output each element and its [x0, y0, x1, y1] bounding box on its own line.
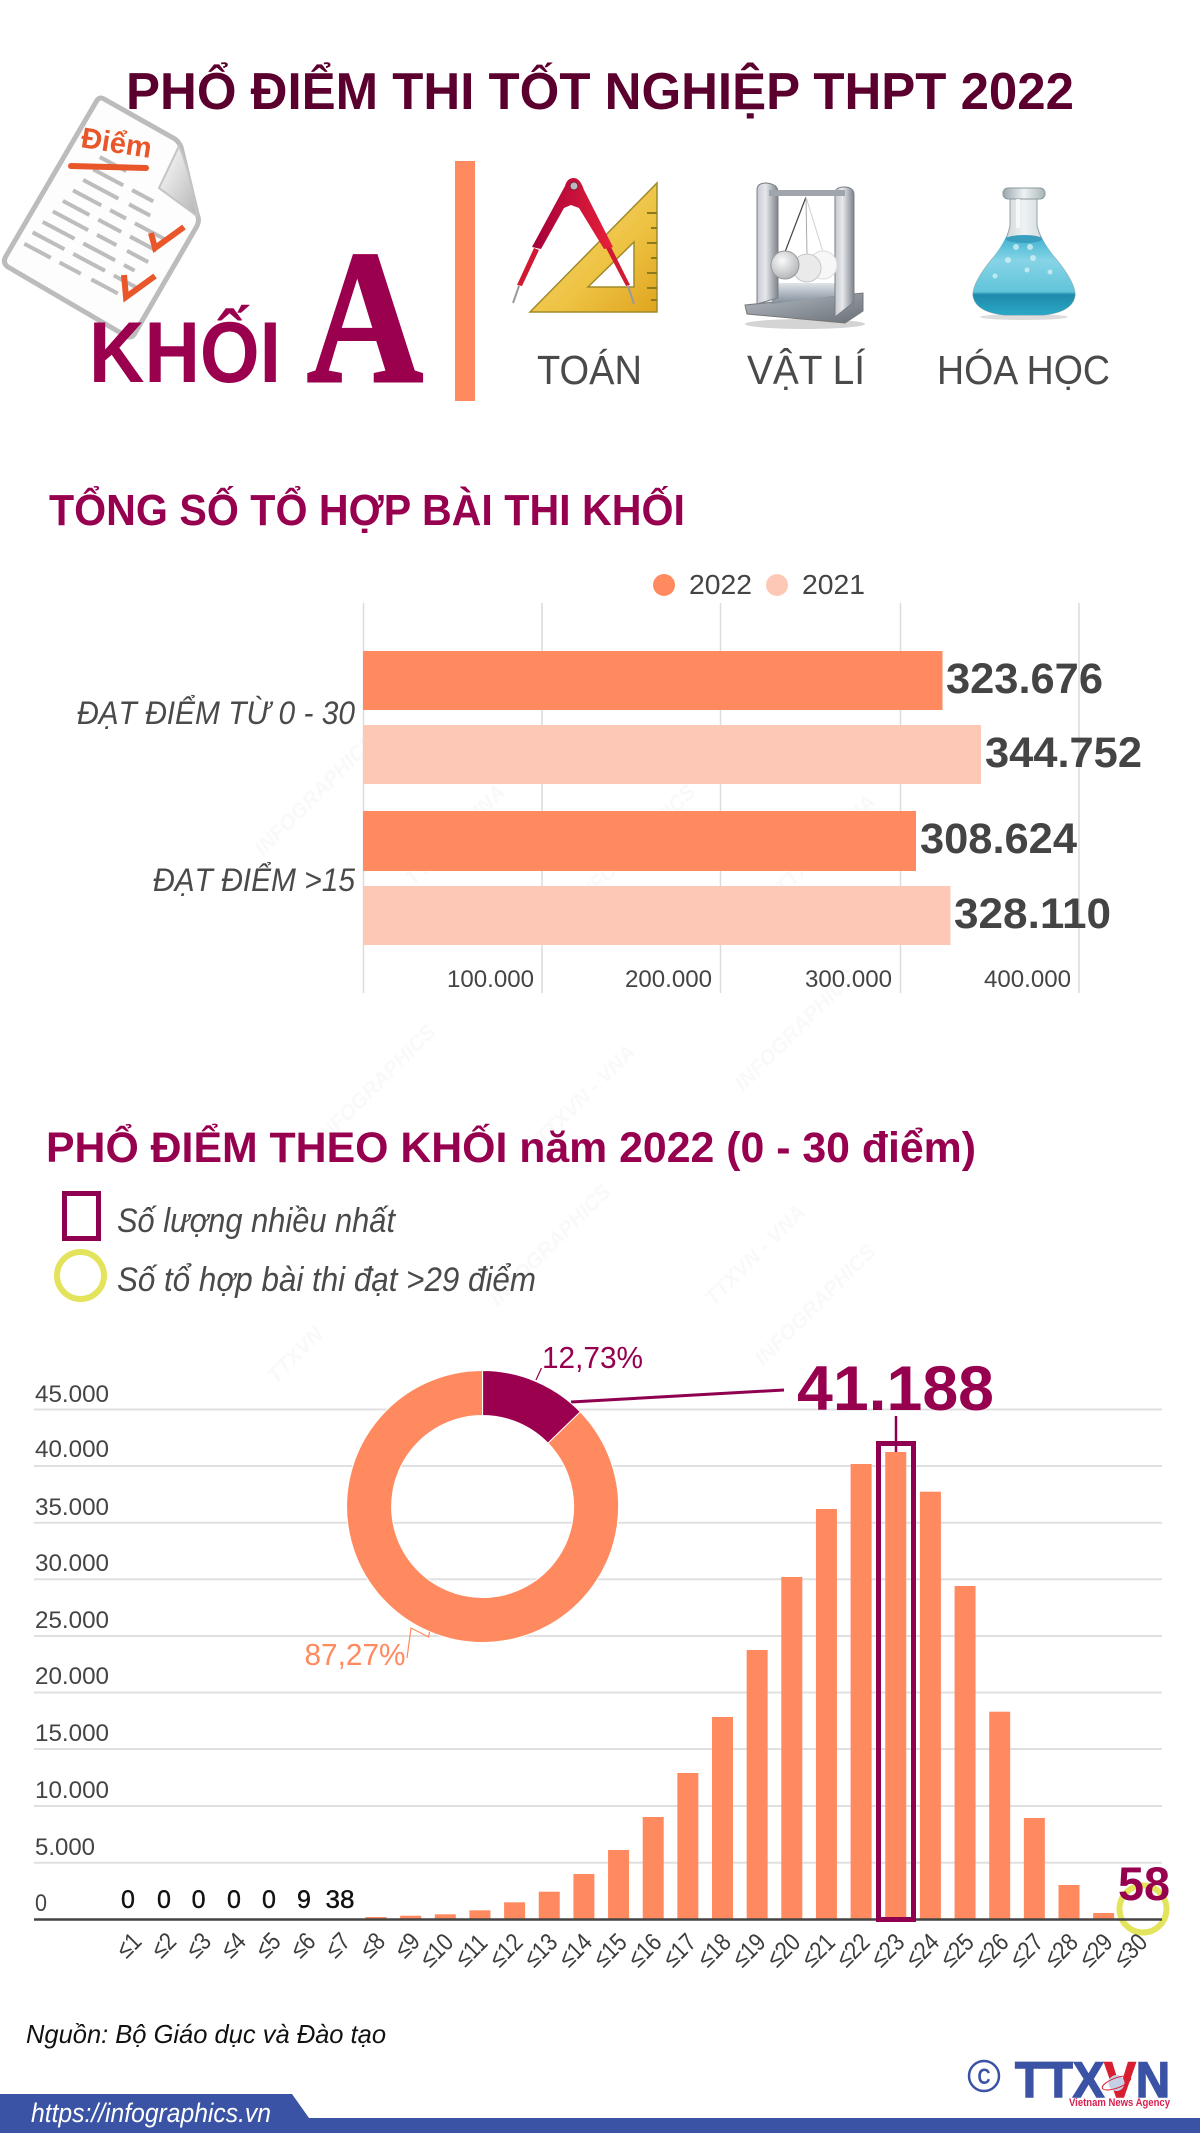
bar: >15 2022 — [363, 811, 916, 871]
x axis labels: ≤26 — [969, 1928, 1014, 1972]
icon: newton cradle — [745, 183, 865, 329]
divider bar — [455, 161, 475, 401]
agency name: Vietnam News Agency — [1069, 2097, 1171, 2109]
watermarks: TTXVN - VNA — [401, 781, 510, 890]
x axis labels: 300.000 — [805, 966, 892, 993]
watermarks: TTXVN — [263, 1322, 328, 1388]
value: 344.752: 344.752 — [985, 729, 1142, 777]
value: 328.110: 328.110 — [954, 890, 1111, 938]
value: 308.624: 308.624 — [920, 815, 1077, 863]
y axis labels: 0 — [35, 1890, 47, 1917]
x axis labels: ≤7 — [319, 1927, 356, 1963]
watermarks: INFOGRAPHICS — [250, 730, 380, 860]
slice: 12,73% — [483, 1370, 580, 1443]
globe — [1101, 2073, 1132, 2093]
x axis labels: 100.000 — [447, 966, 534, 993]
heading: total combinations: TỔNG SỐ TỔ HỢP BÀI THI KHỐI — [49, 484, 685, 535]
watermarks: INFOGRAPHICS — [750, 1240, 880, 1370]
x axis labels — [447, 966, 1071, 993]
label: toan: TOÁN — [537, 347, 642, 393]
x axis labels: ≤22 — [830, 1928, 875, 1972]
copyright mark — [969, 2061, 999, 2091]
footer url: https://infographics.vn — [31, 2098, 271, 2128]
leader line: donut to peak — [571, 1390, 784, 1402]
x axis labels: ≤2 — [145, 1927, 182, 1963]
x axis labels: ≤11 — [449, 1928, 493, 1972]
label: 12,73%: 12,73% — [542, 1340, 643, 1375]
copyright mark: C — [978, 2064, 991, 2089]
text: above 29: Số tổ hợp bài thi đạt >29 điểm — [117, 1261, 536, 1299]
icon: compass and set square — [513, 178, 657, 312]
value: 58: 58 — [1118, 1857, 1170, 1910]
y axis labels: 5.000 — [35, 1834, 95, 1861]
legend: 2022 — [689, 569, 752, 600]
x axis labels: ≤5 — [250, 1927, 286, 1963]
y axis labels: 20.000 — [35, 1663, 109, 1690]
data labels: low scores: 9 — [297, 1886, 311, 1914]
x axis labels: ≤19 — [726, 1928, 771, 1972]
logotype: TTXVN — [1015, 2052, 1170, 2108]
icon: square key — [64, 1194, 98, 1238]
x axis labels: ≤23 — [865, 1928, 910, 1972]
x axis labels: ≤24 — [900, 1928, 945, 1972]
y axis labels: 25.000 — [35, 1607, 109, 1634]
logo: TTXVN — [969, 2052, 1171, 2109]
x axis labels: ≤10 — [414, 1928, 459, 1972]
label: 87,27%: 87,27% — [304, 1637, 406, 1672]
icon: chemistry flask — [973, 188, 1075, 320]
x axis labels: ≤3 — [180, 1927, 216, 1963]
x axis labels: ≤8 — [354, 1927, 390, 1963]
category label: 0-30: ĐẠT ĐIỂM TỪ 0 - 30 — [77, 695, 355, 731]
y axis labels: 35.000 — [35, 1494, 109, 1521]
watermarks — [250, 730, 880, 1388]
x axis labels: ≤16 — [622, 1928, 667, 1972]
x axis labels: ≤30 — [1108, 1928, 1153, 1972]
watermarks: INFOGRAPHICS — [570, 780, 700, 910]
label: 87,27% — [304, 1628, 430, 1672]
axis baseline — [34, 1918, 1162, 1921]
data labels: low scores: 0 — [262, 1886, 276, 1914]
watermarks: TTXVN - VNA — [771, 791, 880, 900]
x axis labels: ≤21 — [796, 1928, 840, 1972]
data labels: low scores: 0 — [157, 1886, 171, 1914]
x axis labels: ≤29 — [1073, 1928, 1118, 1972]
panel: score distribution chart — [34, 1340, 1170, 1972]
x axis labels: ≤4 — [215, 1927, 251, 1963]
heading: khoi: KHỐI — [89, 305, 281, 401]
x axis labels: ≤13 — [518, 1928, 563, 1972]
highlight box: 23 points — [878, 1416, 914, 1920]
heading: letter A: A — [307, 213, 423, 423]
x axis labels: ≤27 — [1004, 1928, 1049, 1972]
data labels: low scores: 0 — [121, 1886, 135, 1914]
bars — [366, 1452, 1114, 1919]
legend: 2021 — [802, 569, 865, 600]
y axis labels: 30.000 — [35, 1550, 109, 1577]
y axis labels — [35, 1381, 109, 1917]
x axis labels: ≤6 — [284, 1927, 321, 1963]
watermarks: INFOGRAPHICS — [730, 965, 860, 1095]
x axis labels: ≤17 — [657, 1928, 702, 1972]
watermarks: INFOGRAPHICS — [485, 1180, 615, 1310]
x axis labels: ≤14 — [553, 1928, 598, 1972]
x axis labels: ≤18 — [692, 1928, 736, 1972]
text: most: Số lượng nhiều nhất — [117, 1202, 396, 1240]
heading: score distribution: PHỔ ĐIỂM THEO KHỐI năm 2022 (0 - 30 điểm) — [46, 1122, 976, 1172]
y axis labels: 40.000 — [35, 1436, 109, 1463]
panel: horizontal bar chart — [77, 569, 1142, 993]
x axis labels: 200.000 — [625, 966, 712, 993]
x axis labels: 400.000 — [984, 966, 1071, 993]
x axis labels: ≤15 — [587, 1928, 632, 1972]
bar: 0-30 2021 — [363, 725, 981, 784]
donut chart — [304, 1340, 643, 1672]
x axis labels: ≤1 — [110, 1927, 147, 1963]
category label: >15: ĐẠT ĐIỂM >15 — [153, 862, 355, 898]
bar: >15 2021 — [363, 886, 950, 945]
label: vat li: VẬT LÍ — [747, 347, 866, 393]
value: 323.676: 323.676 — [946, 655, 1103, 703]
watermarks: TTXVN - VNA — [531, 1041, 640, 1150]
data labels: low scores: 0 — [192, 1886, 206, 1914]
slice: 87,27% — [347, 1370, 619, 1642]
source: Nguồn: Bộ Giáo dục và Đào tạo — [26, 2019, 386, 2049]
value: 41.188: 41.188 — [797, 1354, 994, 1424]
label: hoa hoc: HÓA HỌC — [937, 347, 1110, 393]
x axis labels: ≤20 — [761, 1928, 806, 1972]
y axis labels: 15.000 — [35, 1720, 109, 1747]
watermarks: TTXVN - VNA — [701, 1201, 810, 1310]
x axis labels — [110, 1927, 1153, 1972]
data labels: low scores: 38 — [326, 1886, 354, 1914]
data labels: low scores: 0 — [227, 1886, 241, 1914]
x axis labels: ≤12 — [483, 1928, 528, 1972]
title: PHỔ ĐIỂM THI TỐT NGHIỆP THPT 2022 — [126, 62, 1074, 121]
data labels: low scores — [121, 1886, 354, 1914]
panel: khoi A header — [4, 98, 1110, 423]
watermarks: INFOGRAPHICS — [310, 1020, 440, 1150]
icon: exam paper — [4, 98, 199, 337]
highlight circle: 30 points — [1120, 1886, 1166, 1932]
y axis labels: 10.000 — [35, 1777, 109, 1804]
y axis labels: 45.000 — [35, 1381, 109, 1408]
icon: circle key — [57, 1252, 104, 1299]
footer bar — [0, 2094, 1200, 2133]
legend — [653, 569, 865, 600]
legend: highlight keys — [57, 1194, 536, 1299]
bar: 0-30 2022 — [363, 651, 942, 710]
x axis labels: ≤25 — [934, 1928, 979, 1972]
x axis labels: ≤9 — [389, 1927, 425, 1963]
icon: exam paper: Điểm — [79, 122, 154, 165]
x axis labels: ≤28 — [1039, 1928, 1083, 1972]
